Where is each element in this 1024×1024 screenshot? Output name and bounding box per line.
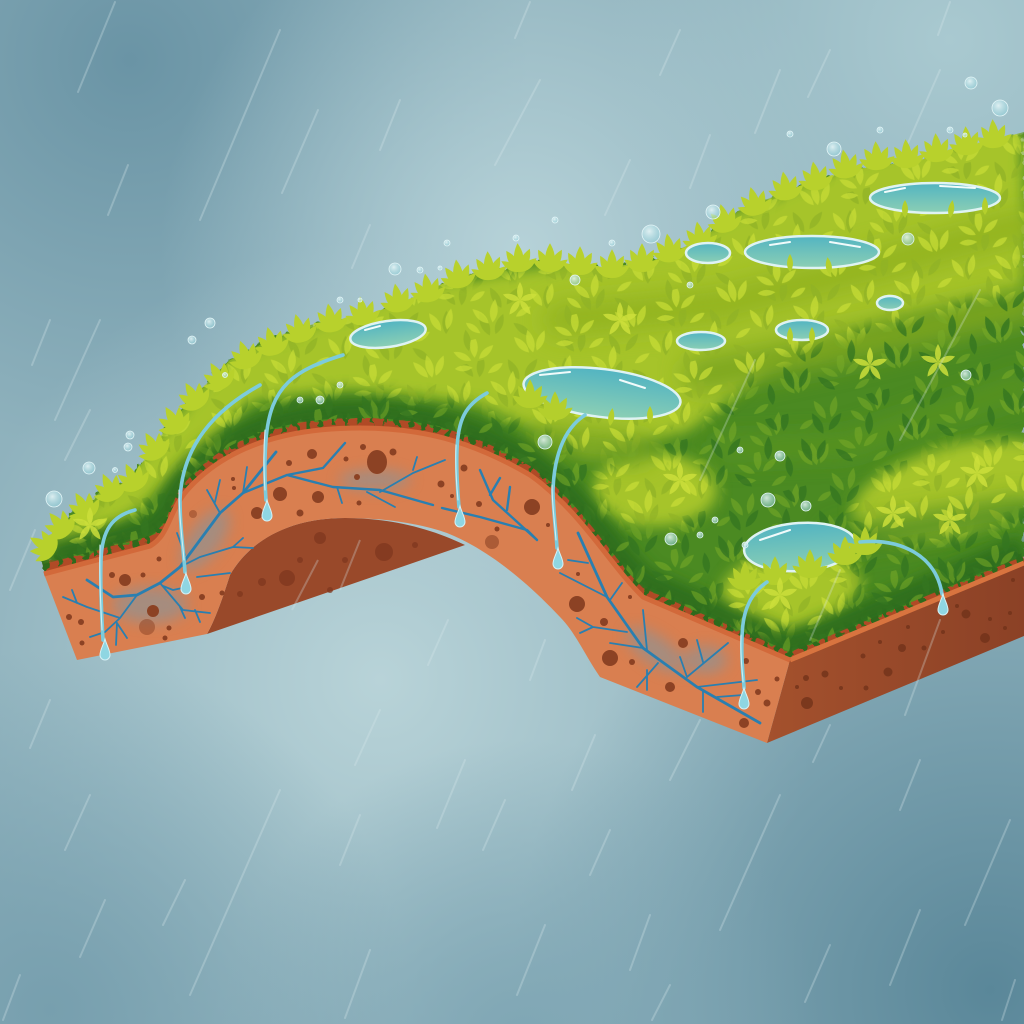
soil: pores — [66, 444, 780, 728]
rain streaks over moss — [700, 290, 980, 715]
soil: underside of arch — [207, 518, 465, 634]
soil: right side top rim — [790, 563, 1024, 660]
bubbles and spray — [46, 77, 1008, 548]
moss: surface shading and leaves — [40, 132, 1024, 652]
soil: blue-grey moisture wash — [112, 470, 727, 681]
water streams running off moss — [100, 355, 942, 688]
puddles on moss — [349, 183, 1000, 575]
soil: right side pores — [795, 578, 1015, 709]
moss: deep shadow along the soil — [50, 412, 1024, 645]
soil: right side face — [767, 563, 1024, 743]
moss: leaves in lit areas — [69, 134, 1024, 640]
soil: front face — [44, 428, 790, 743]
water drops — [100, 500, 948, 709]
soil: blue root veins — [63, 443, 760, 723]
soil: front rim — [44, 428, 790, 660]
dirt band beneath moss — [44, 424, 1024, 656]
moss: base mass with jagged edge — [38, 132, 1024, 652]
puddle highlights — [365, 186, 975, 540]
moss: leaf tufts along the top edge — [20, 118, 1015, 571]
moss: leaves in shaded areas — [44, 132, 1024, 652]
moss: bright leaf rosettes — [72, 282, 995, 611]
grass clumps over puddle edges — [510, 197, 988, 593]
